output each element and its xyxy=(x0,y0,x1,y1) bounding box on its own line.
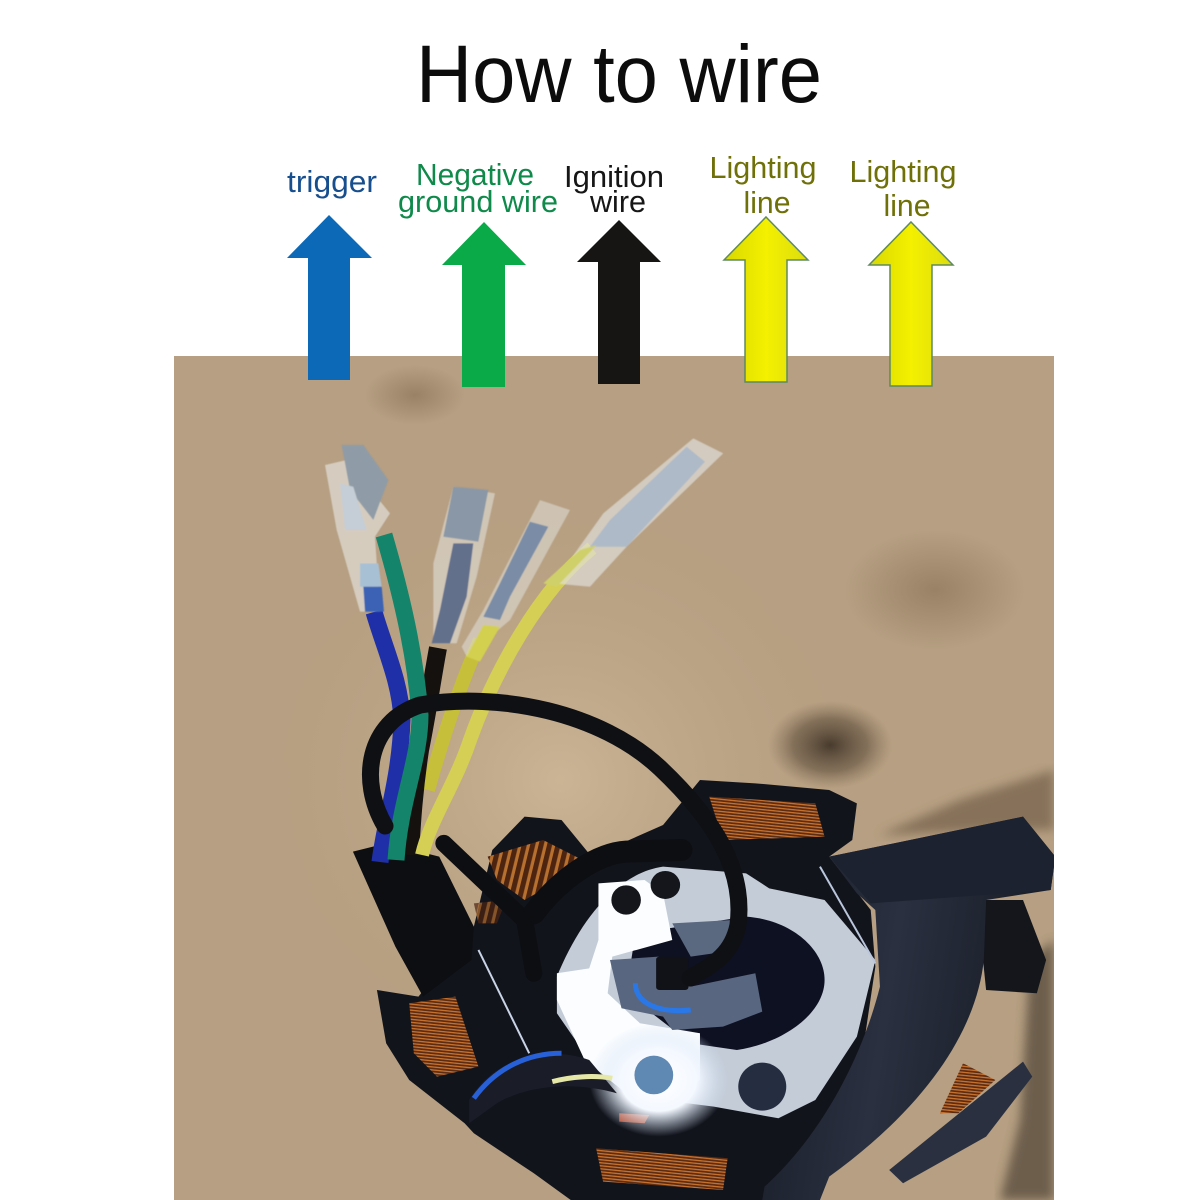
stator assembly xyxy=(353,780,1055,1200)
plate hole xyxy=(738,1063,786,1111)
connectors xyxy=(325,438,723,662)
label: negative ground wire: ground wire xyxy=(398,184,558,219)
label: negative ground wire: Negative xyxy=(416,157,534,192)
black sleeve xyxy=(353,843,474,997)
right tube and arm xyxy=(762,817,1055,1200)
left plate edge strip xyxy=(478,950,529,1053)
gray clamp xyxy=(610,957,762,1030)
green wire xyxy=(384,535,420,860)
plate dark centre xyxy=(626,917,825,1050)
label: ignition wire: wire xyxy=(589,184,646,219)
coil upper left xyxy=(488,840,578,900)
coil left xyxy=(409,997,478,1077)
title: How to wire xyxy=(416,29,822,120)
body silhouette xyxy=(377,780,875,1200)
label: trigger: trigger xyxy=(287,164,377,199)
blue wire xyxy=(374,612,402,862)
label: lighting line 2: line xyxy=(884,188,930,223)
connector shrouds xyxy=(325,460,390,612)
label: ignition wire xyxy=(564,159,664,219)
label: lighting line 1: Lighting xyxy=(710,150,816,185)
label: negative ground wire xyxy=(398,157,558,219)
thin black wires xyxy=(444,843,682,973)
rear dark part behind tube xyxy=(977,900,1046,993)
silver plate xyxy=(557,867,875,1118)
yellow wire 1 xyxy=(428,640,480,790)
arrow: black xyxy=(577,220,661,384)
lower left wire bundle xyxy=(469,1054,617,1123)
connector metal xyxy=(342,445,388,520)
coil lower right xyxy=(940,1063,995,1113)
coil top right xyxy=(709,797,825,840)
label: lighting line 1 xyxy=(710,150,816,220)
arrow: blue xyxy=(287,215,372,380)
label: lighting line 2 xyxy=(850,154,956,223)
arrow: yellow 2 xyxy=(869,222,953,386)
yellow wire 2 xyxy=(422,548,592,855)
wires xyxy=(370,535,739,978)
arrow: green xyxy=(442,222,526,387)
foot pad lower right xyxy=(889,1062,1032,1183)
bright bracket xyxy=(557,880,700,1103)
label: lighting line 2: Lighting xyxy=(850,154,956,189)
black wire xyxy=(410,648,438,855)
black loop wire xyxy=(370,701,739,978)
coil bottom xyxy=(596,1148,728,1190)
photo: stator on cardboard xyxy=(174,356,1055,1200)
top connector detail xyxy=(611,885,641,915)
label: ignition wire: Ignition xyxy=(564,159,664,194)
label: lighting line 1: line xyxy=(744,185,790,220)
arrow: yellow 1 xyxy=(724,217,808,382)
